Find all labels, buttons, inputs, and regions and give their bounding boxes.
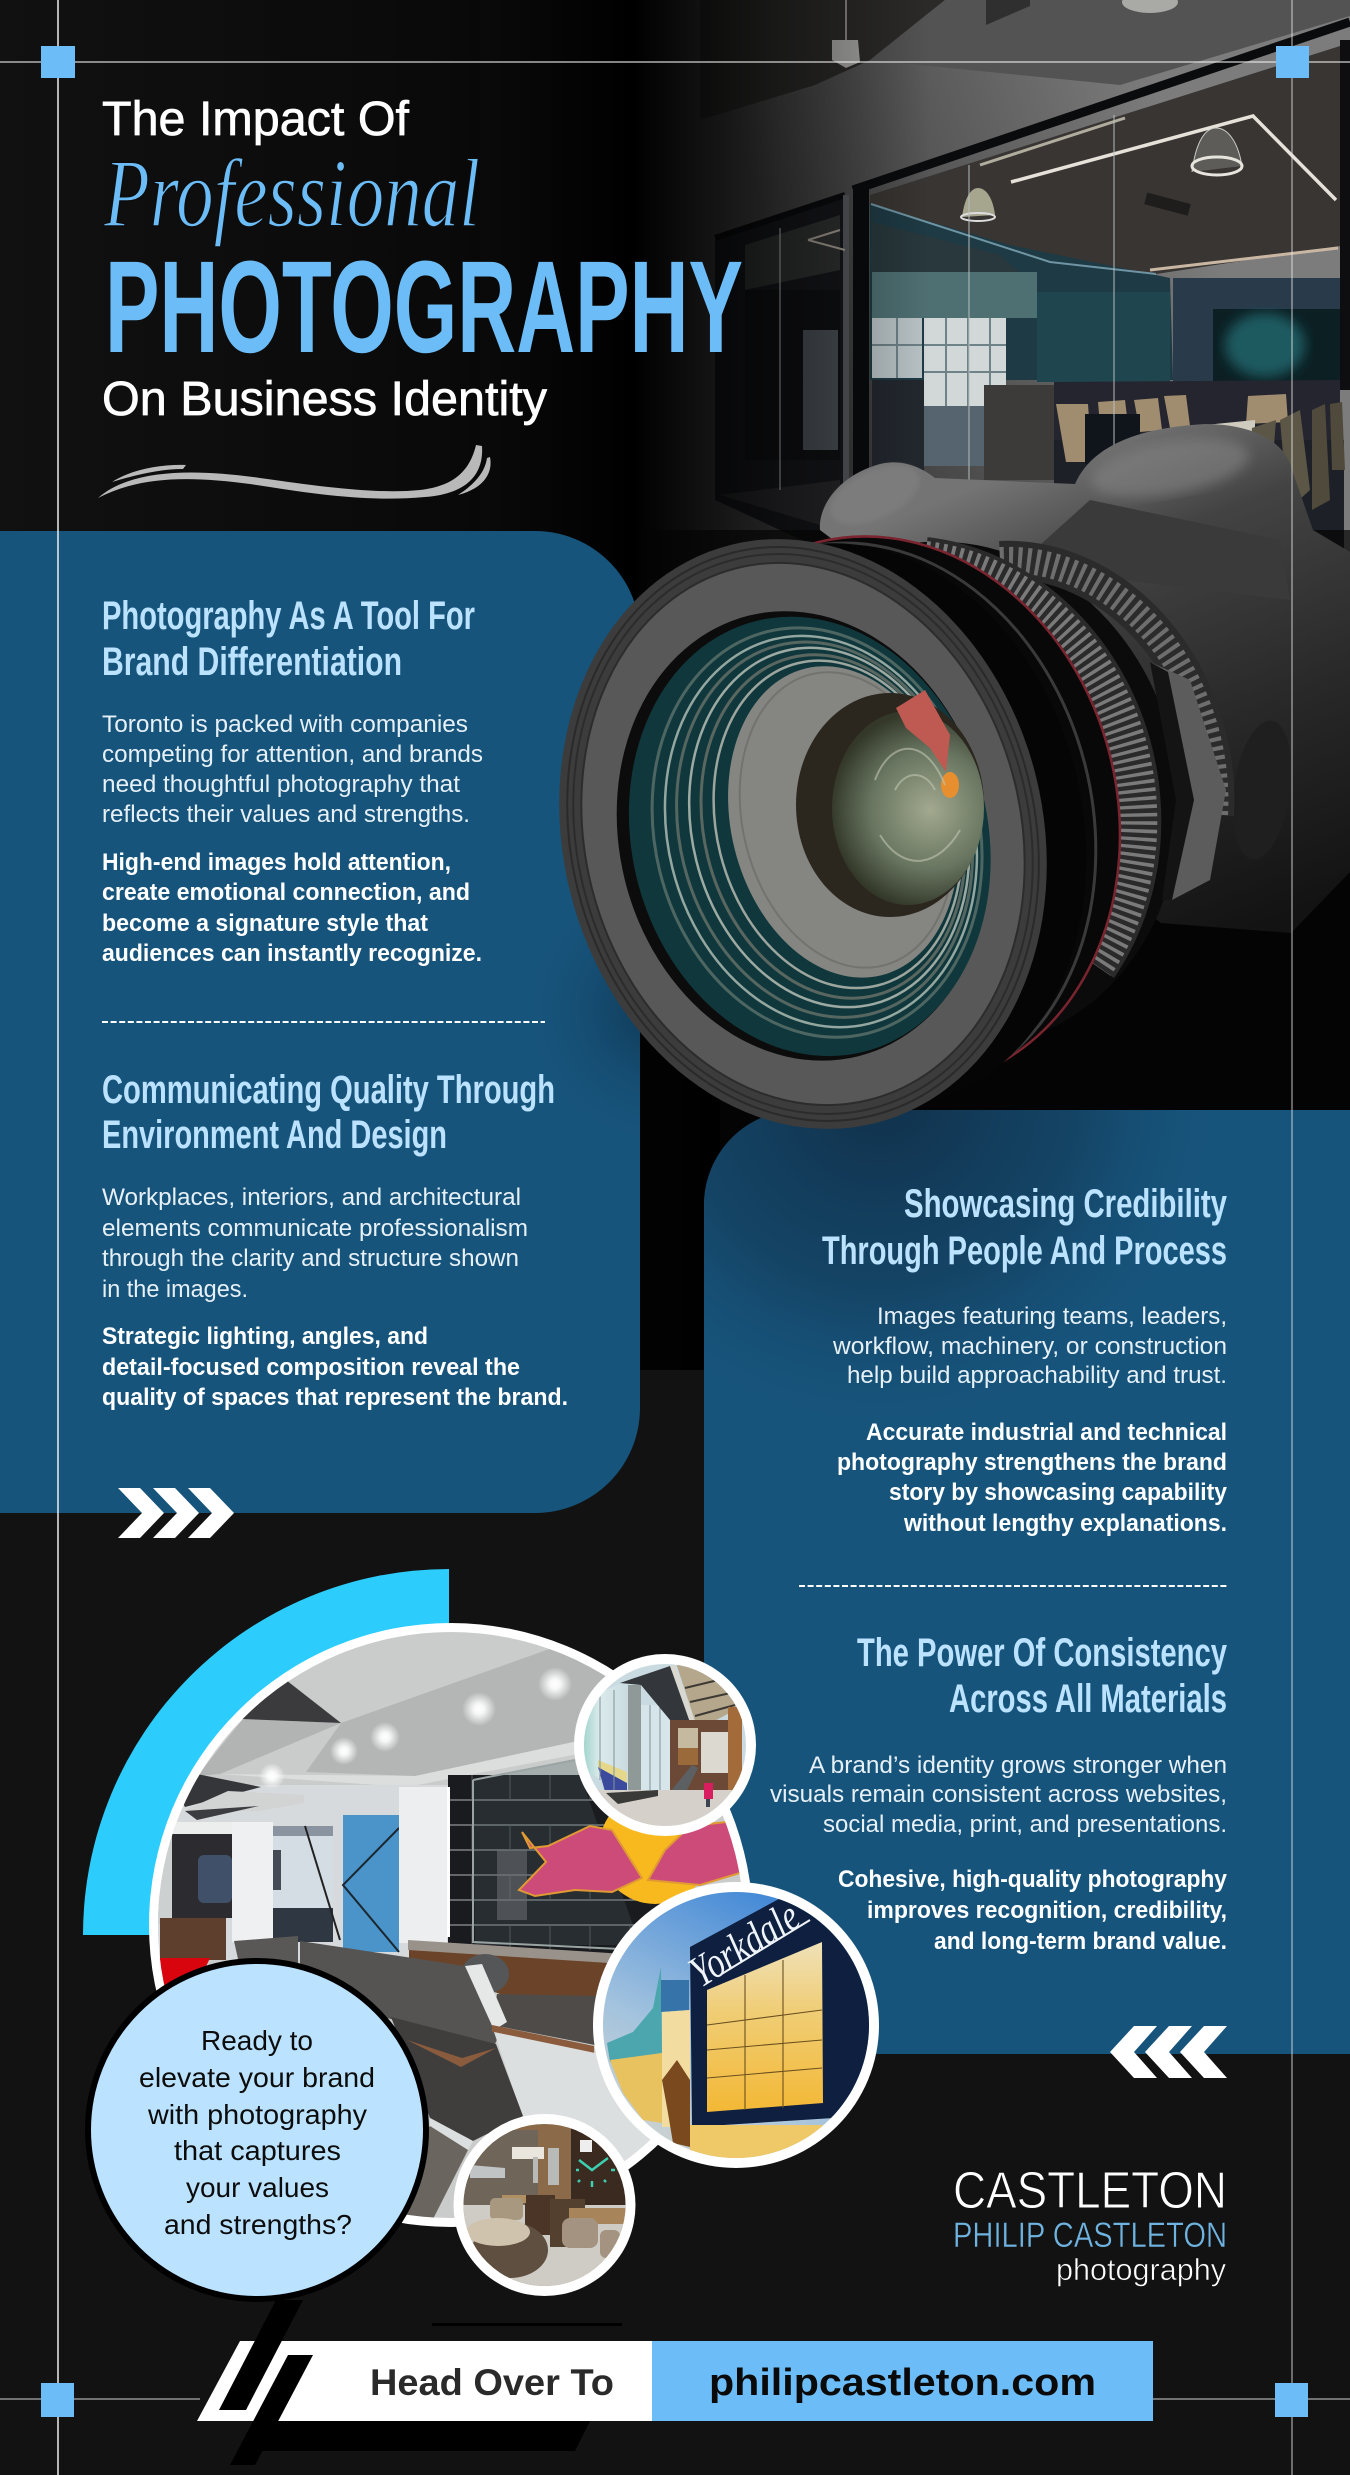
logo tagline: photography xyxy=(1056,2252,1226,2287)
lens barrel xyxy=(576,486,1233,1155)
fade of office photo xyxy=(480,0,1350,600)
callout text xyxy=(139,2025,375,2240)
swoosh decoration xyxy=(98,445,491,499)
heading: Brand Differentiation xyxy=(102,640,402,684)
body text: through the clarity and structure shown xyxy=(102,1245,519,1272)
bold text: detail-focused composition reveal the xyxy=(102,1354,520,1381)
body text xyxy=(770,1752,1227,1838)
body text: Toronto is packed with companies xyxy=(102,711,468,738)
body text: Images featuring teams, leaders, xyxy=(877,1303,1227,1330)
heading xyxy=(822,1182,1228,1273)
section: brand differentiation xyxy=(102,594,483,967)
title xyxy=(102,93,743,426)
divider: right xyxy=(799,1585,1227,1587)
bold text: become a signature style that xyxy=(102,910,428,937)
small photo: atrium xyxy=(574,1654,756,1836)
callout text: Ready to xyxy=(201,2025,313,2056)
heading: Showcasing Credibility xyxy=(904,1182,1228,1226)
body text: visuals remain consistent across websites, xyxy=(770,1781,1227,1808)
heading xyxy=(102,594,475,684)
right room ceiling xyxy=(870,46,1340,274)
heading xyxy=(857,1631,1228,1721)
bright window xyxy=(872,318,922,378)
glass verticals xyxy=(779,115,1115,490)
body text: reflects their values and strengths. xyxy=(102,801,470,828)
ceiling panels xyxy=(306,1649,606,1776)
title script word: Professional xyxy=(103,140,480,248)
divider: left xyxy=(102,1021,545,1023)
body text: A brand’s identity grows stronger when xyxy=(809,1752,1227,1779)
heading: The Power Of Consistency xyxy=(857,1631,1228,1675)
body text xyxy=(102,711,483,828)
window one xyxy=(273,1826,333,1942)
heading: Communicating Quality Through xyxy=(102,1068,555,1112)
bold text: Strategic lighting, angles, and xyxy=(102,1323,428,1350)
column two xyxy=(399,1787,447,1943)
curved glass xyxy=(607,1967,662,2062)
fade below office xyxy=(640,530,1350,600)
panel: right xyxy=(704,1110,1350,2054)
body text: workflow, machinery, or construction xyxy=(832,1333,1227,1360)
bold text: improves recognition, credibility, xyxy=(867,1897,1227,1924)
body text xyxy=(832,1303,1227,1389)
small photo: lounge xyxy=(454,2114,636,2296)
banner url: philipcastleton.com xyxy=(709,2362,1096,2404)
led lines xyxy=(1011,116,1336,200)
callout circle xyxy=(88,1961,426,2299)
right wall and tv xyxy=(1173,278,1340,382)
window two xyxy=(343,1815,399,1952)
wood edge xyxy=(492,2025,594,2054)
frames and glass xyxy=(853,22,1350,190)
heading: Photography As A Tool For xyxy=(102,594,475,638)
left tile xyxy=(172,1834,232,1918)
clock xyxy=(576,2158,615,2187)
bold text: story by showcasing capability xyxy=(889,1479,1228,1506)
bold text: photography strengthens the brand xyxy=(837,1449,1227,1476)
callout text: with photography xyxy=(147,2099,367,2130)
callout text: elevate your brand xyxy=(139,2062,375,2093)
body text: competing for attention, and brands xyxy=(102,741,483,768)
body text: elements communicate professionalism xyxy=(102,1215,528,1242)
pendant lamps xyxy=(1192,128,1242,172)
banner label: Head Over To xyxy=(370,2362,614,2403)
title main word: PHOTOGRAPHY xyxy=(105,233,743,380)
red bull sign xyxy=(517,1816,740,1904)
panel: left xyxy=(0,531,640,1513)
dark desk lower xyxy=(391,2017,523,2141)
heading xyxy=(102,1068,555,1157)
heading: Across All Materials xyxy=(949,1677,1227,1721)
callout text: that captures xyxy=(174,2135,341,2166)
bold text xyxy=(838,1866,1228,1955)
lights xyxy=(540,1668,570,1700)
bold text: audiences can instantly recognize. xyxy=(102,940,482,967)
camera xyxy=(498,424,1350,1181)
chairs xyxy=(1056,404,1092,462)
body text: need thoughtful photography that xyxy=(102,771,460,798)
small photo: yorkdale: Yorkdale xyxy=(680,1891,808,1996)
bold text xyxy=(102,849,482,967)
black tile wall xyxy=(447,1760,673,1955)
body text xyxy=(102,1184,528,1303)
bold text: without lengthy explanations. xyxy=(903,1510,1227,1537)
body text: social media, print, and presentations. xyxy=(823,1811,1227,1838)
building xyxy=(690,1899,869,2125)
white lower block xyxy=(494,2032,650,2161)
desk xyxy=(234,1936,298,1963)
title line 1: The Impact Of xyxy=(102,93,410,146)
bold text: and long-term brand value. xyxy=(934,1928,1227,1955)
heading: Environment And Design xyxy=(102,1113,447,1157)
lens front xyxy=(498,487,1108,1181)
left meeting room xyxy=(715,198,845,560)
title line 4: On Business Identity xyxy=(102,373,547,426)
bold text: create emotional connection, and xyxy=(102,879,470,906)
white column xyxy=(232,1822,273,1942)
bold text: High-end images hold attention, xyxy=(102,849,451,876)
cabinets xyxy=(409,1950,608,1996)
office chair xyxy=(461,1954,509,1994)
cyan quarter arc xyxy=(83,1569,449,1935)
iris xyxy=(796,690,984,917)
chevrons: left xyxy=(118,1488,234,1538)
bold text: Accurate industrial and technical xyxy=(866,1419,1227,1446)
bold text xyxy=(837,1419,1228,1537)
section: credibility xyxy=(822,1182,1228,1537)
chevrons: right xyxy=(1110,2026,1227,2078)
floor xyxy=(492,1994,600,2046)
bold text: quality of spaces that represent the brand. xyxy=(102,1384,568,1411)
logo xyxy=(953,2162,1227,2287)
section: quality through environment xyxy=(102,1068,568,1411)
bold text xyxy=(102,1323,568,1411)
body text: Workplaces, interiors, and architectural xyxy=(102,1184,521,1211)
body text: help build approachability and trust. xyxy=(847,1362,1227,1389)
callout text: your values xyxy=(186,2172,329,2203)
logo name: PHILIP CASTLETON xyxy=(953,2216,1227,2255)
call to action banner xyxy=(197,2300,1153,2465)
callout text: and strengths? xyxy=(164,2209,352,2240)
body text: in the images. xyxy=(102,1276,248,1303)
small photo: yorkdale xyxy=(593,1882,880,2170)
office photo background xyxy=(668,0,1350,552)
camera body xyxy=(820,424,1350,933)
bold text: Cohesive, high-quality photography xyxy=(838,1866,1228,1893)
section: consistency xyxy=(770,1631,1228,1955)
main interior photo xyxy=(140,1620,760,2230)
logo wordmark: CASTLETON xyxy=(953,2162,1227,2220)
